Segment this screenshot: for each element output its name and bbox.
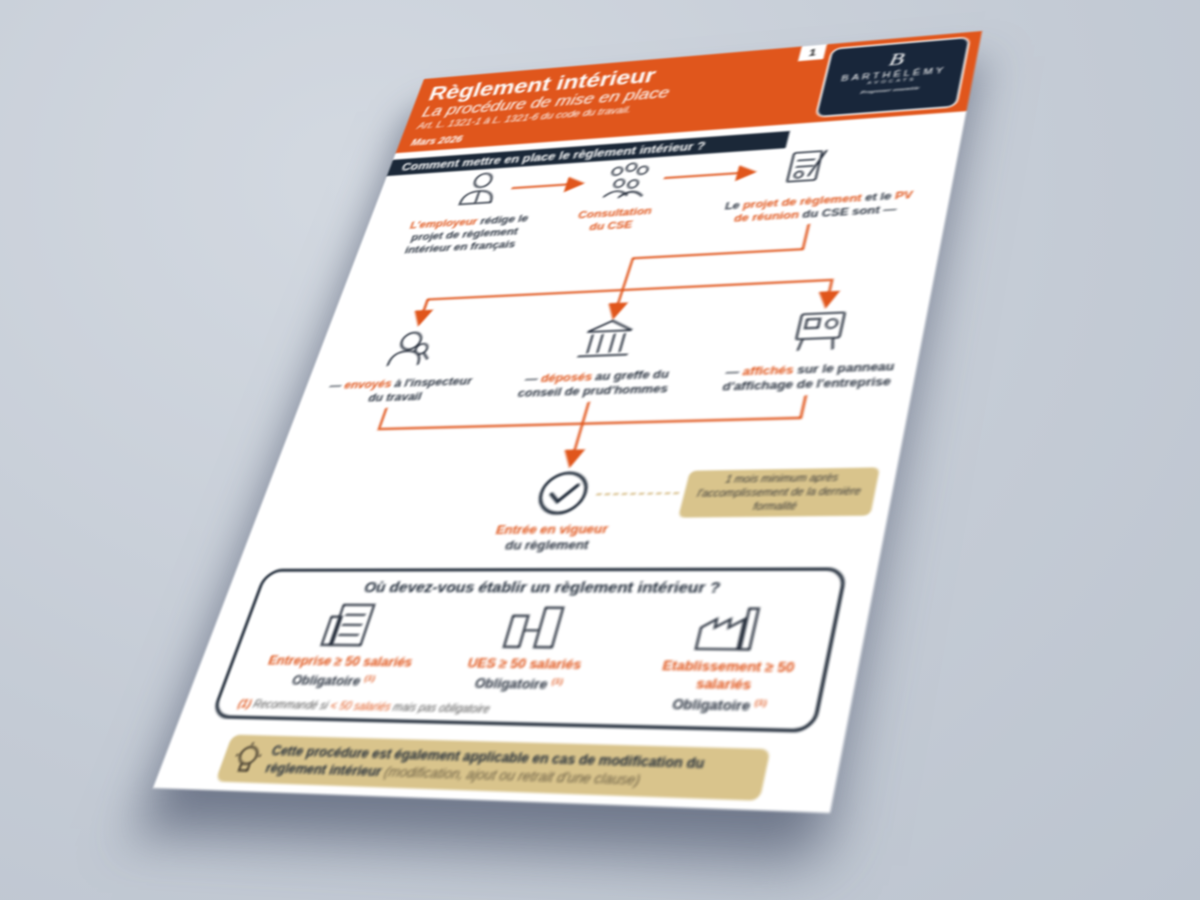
icon: notice board xyxy=(794,312,845,350)
branch text: affichés: — affichés sur le panneau d'affichage de l'entreprise xyxy=(721,360,896,393)
arrow: split to envoyés and affichés xyxy=(420,280,832,323)
step 2 text: Consultation xyxy=(577,205,653,221)
icon: document signing xyxy=(787,151,826,182)
dashed connector xyxy=(596,493,682,494)
entry into force text xyxy=(494,522,610,554)
page number: 1 xyxy=(808,47,817,58)
title: Règlement intérieur xyxy=(426,64,659,105)
logo: B xyxy=(887,49,906,70)
callout: delay: 1 mois minimum après l'accomplissement de la dernière formalité xyxy=(696,473,862,513)
step 1 text: L'employeur rédige le projet de règlement intérieur en français xyxy=(403,213,530,256)
column: etablissement: Etablissement ≥ 50 salariés xyxy=(661,658,796,693)
icon: inspector xyxy=(388,332,437,365)
icon: checkmark xyxy=(535,473,591,513)
branch text: envoyés: — envoyés à l'inspecteur du travail xyxy=(327,375,474,404)
icon: lightbulb xyxy=(234,741,262,774)
arrow: to déposés xyxy=(614,224,809,316)
flow diagram xyxy=(318,148,848,653)
legal reference: Art. L. 1321-1 à L. 1321-6 du code du travail. xyxy=(416,104,633,131)
column: entreprise xyxy=(266,653,414,690)
panel: where xyxy=(210,567,848,733)
entry into force text: du règlement xyxy=(503,538,591,552)
section bar: Comment mettre en place le règlement intérieur ? xyxy=(400,139,707,173)
column: entreprise: Entreprise ≥ 50 salariés xyxy=(266,653,414,670)
step 2 text: du CSE xyxy=(588,219,634,233)
date: Mars 2026 xyxy=(409,134,464,148)
logo: AVOCATS xyxy=(867,77,917,86)
callout: delay xyxy=(678,467,880,518)
icon: factory xyxy=(696,608,759,649)
step 2 text xyxy=(577,205,653,233)
branch text: déposés: — déposés au greffe du conseil de prud'hommes xyxy=(516,368,671,400)
arrow: converge to entry xyxy=(365,395,806,468)
logo xyxy=(815,36,971,118)
column: etablissement xyxy=(660,658,796,715)
icon: UES buildings xyxy=(504,608,563,647)
callout text: Cette procédure est également applicable en cas de modification du règlement intérieur (modification, ajout ou retrait d'une clause) xyxy=(263,743,706,788)
header band xyxy=(396,31,982,153)
column: etablissement: Obligatoire (1) xyxy=(670,697,768,714)
arrow: step2 to step3 xyxy=(664,172,752,178)
icon: office building xyxy=(322,605,374,645)
icon: employer xyxy=(460,173,501,204)
logo: BARTHÉLÉMY xyxy=(840,66,947,83)
logo: Progresser ensemble xyxy=(860,85,920,95)
page number xyxy=(798,44,827,61)
callout: modification xyxy=(215,735,771,801)
footnote: (1) Recommandé si < 50 salariés mais pas obligatoire xyxy=(236,699,491,716)
page document xyxy=(153,31,982,813)
entry into force text: Entrée en vigueur xyxy=(494,522,610,537)
icon: CSE group xyxy=(603,162,652,198)
arrow: step1 to step2 xyxy=(512,184,580,188)
icon: courthouse xyxy=(578,320,637,356)
panel heading: Où devez-vous établir un règlement intérieur ? xyxy=(362,579,722,597)
subtitle: La procédure de mise en place xyxy=(420,85,672,120)
column: UES xyxy=(466,656,583,694)
column: UES: UES ≥ 50 salariés xyxy=(466,656,583,672)
column: UES: Obligatoire (1) xyxy=(473,676,564,692)
section bar xyxy=(387,131,790,176)
step 3 text: Le projet de règlement et le PV de réunion du CSE sont — xyxy=(724,189,914,224)
column: entreprise: Obligatoire (1) xyxy=(290,673,377,689)
